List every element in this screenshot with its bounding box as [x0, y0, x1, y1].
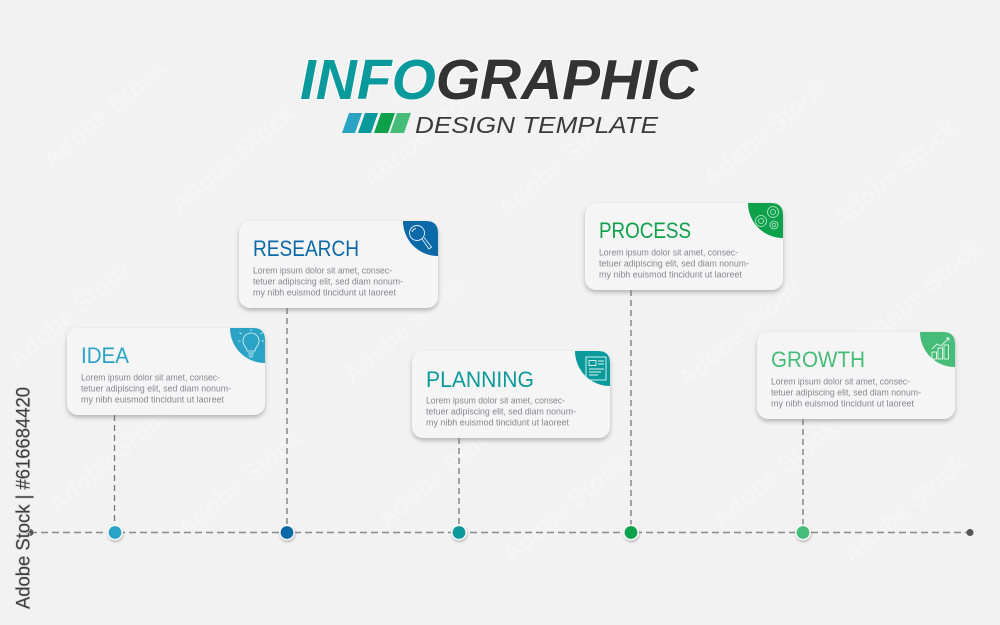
panel: idea [67, 328, 265, 415]
marker: planning [451, 524, 467, 540]
text: Adobe Stock [672, 274, 807, 394]
text: Adobe Stock [172, 424, 307, 544]
panel: growth [757, 332, 955, 419]
text block: growth: my nibh euismod tincidunt ut laoreet [771, 398, 914, 408]
text block: planning: Lorem ipsum dolor sit amet, consec- [426, 394, 565, 406]
text: Adobe Stock [337, 269, 472, 389]
icon: light bulb [230, 328, 265, 363]
watermark: stock id: Adobe Stock | #616684420 [12, 387, 34, 609]
text block: growth: tetuer adipiscing elit, sed diam nonum- [771, 386, 921, 398]
text block: research: Lorem ipsum dolor sit amet, consec- [253, 264, 392, 276]
text block: idea: my nibh euismod tincidunt ut laoreet [81, 394, 224, 404]
connector: planning [458, 438, 460, 526]
heading: research: RESEARCH [253, 236, 359, 261]
text block: research: my nibh euismod tincidunt ut laoreet [253, 286, 396, 298]
panel: research [239, 221, 438, 308]
text block: planning [426, 394, 576, 428]
text block: planning: tetuer adipiscing elit, sed diam nonum- [426, 406, 576, 416]
text: Adobe Stock [357, 74, 492, 194]
text block: idea: tetuer adipiscing elit, sed diam nonum- [81, 382, 231, 394]
heading: process: PROCESS [599, 218, 691, 243]
marker: research [279, 524, 295, 540]
icon: growth chart [920, 332, 955, 367]
heading: idea: IDEA [81, 343, 129, 368]
marker: growth [795, 524, 811, 540]
text: Adobe Stock [492, 104, 627, 224]
text block: idea: Lorem ipsum dolor sit amet, consec- [81, 372, 220, 382]
text: Adobe Stock [852, 234, 987, 354]
text: Adobe Stock [2, 254, 137, 374]
text block: research: tetuer adipiscing elit, sed diam nonum- [253, 276, 403, 286]
text: Adobe Stock [42, 399, 177, 519]
icon: gears [748, 203, 783, 238]
text: Adobe Stock [497, 449, 632, 569]
marker: process [623, 524, 639, 540]
text: Adobe Stock [37, 54, 172, 174]
text block: research [253, 264, 403, 298]
panel: planning [412, 351, 610, 438]
text block: growth [771, 376, 921, 408]
subtitle: DESIGN TEMPLATE [415, 112, 658, 138]
connector: research [286, 308, 288, 526]
icon: subtitle colour stripes [342, 113, 411, 133]
text block: idea [81, 372, 231, 404]
text: Adobe Stock [372, 414, 507, 534]
text block: process: Lorem ipsum dolor sit amet, consec- [599, 246, 738, 258]
marker: idea [107, 524, 123, 540]
panel: process [585, 203, 783, 290]
text block: process: my nibh euismod tincidunt ut laoreet [599, 268, 742, 280]
text block: growth: Lorem ipsum dolor sit amet, consec- [771, 376, 910, 386]
icon: document [575, 351, 610, 386]
heading: planning: PLANNING [426, 367, 534, 392]
title: INFOGRAPHIC [300, 48, 699, 112]
connector: idea [114, 415, 116, 526]
text block: process: tetuer adipiscing elit, sed diam nonum- [599, 258, 749, 268]
connector: growth [802, 419, 804, 526]
text: Adobe Stock [837, 449, 972, 569]
text block: process [599, 246, 749, 280]
text: Adobe Stock [165, 99, 300, 219]
heading: growth: GROWTH [771, 347, 865, 372]
connector: process [630, 290, 632, 526]
text: Adobe Stock [827, 114, 962, 234]
timeline [26, 529, 974, 536]
text: Adobe Stock [697, 74, 832, 194]
icon: magnifier [403, 221, 438, 256]
text block: planning: my nibh euismod tincidunt ut laoreet [426, 416, 569, 428]
text: Adobe Stock [707, 414, 842, 534]
